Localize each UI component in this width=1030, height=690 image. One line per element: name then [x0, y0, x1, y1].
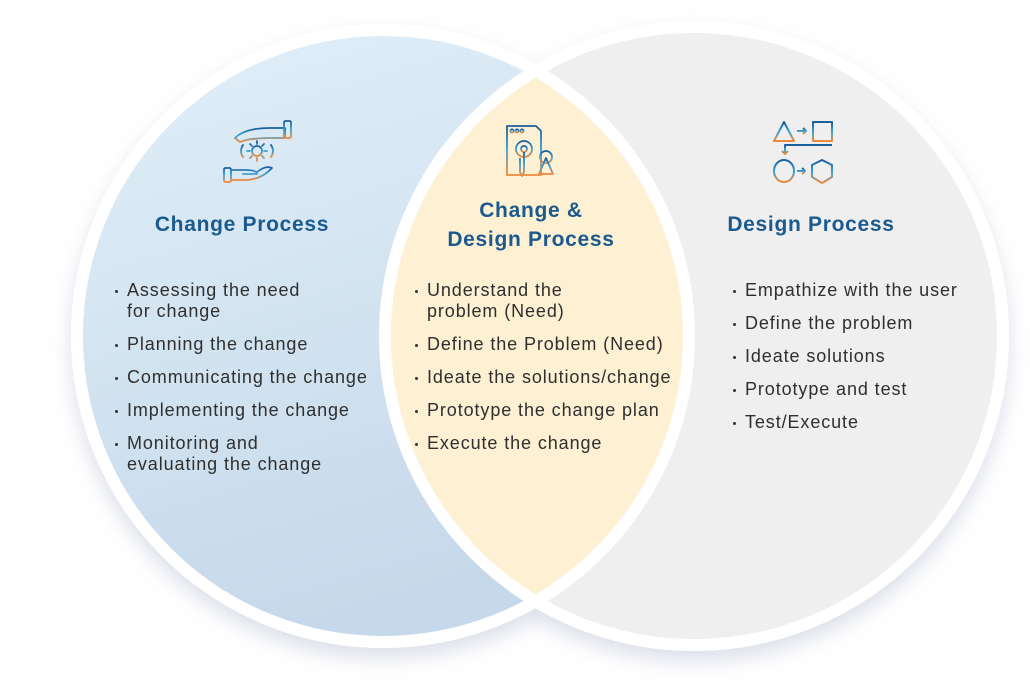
list: change process: Communicating the change	[127, 367, 368, 387]
list: change process: Planning the change	[127, 334, 308, 354]
list: change & design process: Ideate the solutions/change	[427, 367, 671, 387]
icon: hands with gear	[224, 121, 291, 182]
list: change & design process: Define the Problem (Need)	[427, 334, 664, 354]
list: design process	[733, 280, 958, 432]
list: design process: Test/Execute	[745, 412, 859, 432]
icon: shapes flow	[774, 122, 832, 183]
list: design process: Empathize with the user	[745, 280, 958, 300]
circle: change process	[77, 30, 689, 642]
list: change & design process: problem (Need)	[427, 301, 565, 321]
icon: document with gear and shapes	[507, 126, 553, 176]
list: change & design process: Prototype the change plan	[427, 400, 660, 420]
title: design process: Design Process	[727, 213, 895, 236]
title: change process: Change Process	[155, 213, 329, 236]
list: change process	[115, 280, 368, 474]
list: design process: Define the problem	[745, 313, 913, 333]
list: change & design process	[415, 280, 671, 453]
list: design process: Prototype and test	[745, 379, 907, 399]
list: change process: Implementing the change	[127, 400, 350, 420]
list: change process: for change	[127, 301, 221, 321]
list: change process: Monitoring and	[127, 433, 259, 453]
list: change & design process: Execute the change	[427, 433, 602, 453]
list: change process: evaluating the change	[127, 454, 322, 474]
title: change & design process: Change &	[479, 199, 583, 222]
circle: design process	[385, 27, 1003, 645]
lens: overlap	[391, 78, 683, 594]
list: change process: Assessing the need	[127, 280, 300, 300]
list: change & design process: Understand the	[427, 280, 563, 300]
title: change & design process	[447, 199, 615, 251]
title: change & design process: Design Process	[447, 228, 615, 251]
list: design process: Ideate solutions	[745, 346, 886, 366]
